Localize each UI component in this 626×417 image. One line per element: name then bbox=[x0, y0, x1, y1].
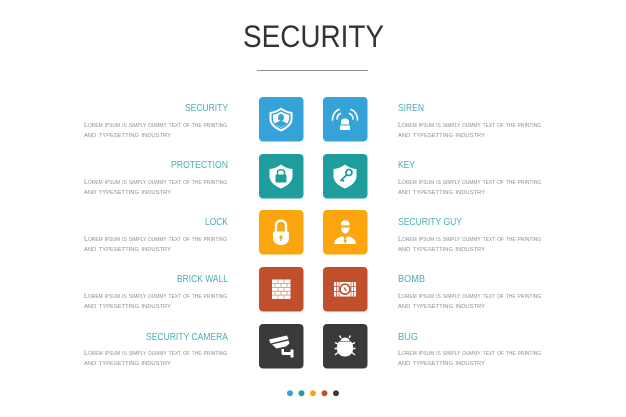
icon: protection shield with lock bbox=[259, 154, 304, 198]
pagination dots bbox=[287, 390, 339, 396]
panel: bug text: and typesetting industry bbox=[398, 358, 486, 367]
panel: siren text: SIREN bbox=[398, 102, 424, 114]
icon: bug bbox=[323, 324, 368, 368]
panel: security guy text: and typesetting industry bbox=[398, 244, 486, 253]
panel: security guy text: Lorem ipsum is simply dummy text of the printing bbox=[398, 234, 541, 243]
panel: brick wall text: BRICK WALL bbox=[177, 273, 228, 285]
panel: key text: Lorem ipsum is simply dummy text of the printing bbox=[398, 177, 541, 186]
panel: lock text bbox=[84, 216, 228, 253]
panel: brick wall text: Lorem ipsum is simply dummy text of the printing bbox=[84, 291, 227, 300]
icon: siren bbox=[323, 97, 368, 142]
panel: bomb text: BOMB bbox=[398, 273, 425, 285]
icon: padlock bbox=[259, 210, 304, 254]
panel: siren text: and typesetting industry bbox=[398, 130, 486, 139]
panel: key text bbox=[398, 159, 541, 196]
panel: protection text: Lorem ipsum is simply dummy text of the printing bbox=[84, 177, 227, 186]
panel: protection text bbox=[84, 159, 228, 196]
panel: brick wall text: and typesetting industry bbox=[84, 301, 172, 310]
panel: bug text: BUG bbox=[398, 331, 418, 343]
title: SECURITY bbox=[243, 18, 384, 54]
title underline bbox=[257, 70, 368, 71]
panel: siren text bbox=[398, 102, 541, 139]
panel: security text: and typesetting industry bbox=[84, 130, 172, 139]
icon: key shield bbox=[323, 154, 368, 198]
icon: brick wall bbox=[259, 267, 304, 312]
panel: protection text: PROTECTION bbox=[171, 159, 228, 171]
panel: bomb text: Lorem ipsum is simply dummy text of the printing bbox=[398, 291, 541, 300]
panel: security camera text: Lorem ipsum is simply dummy text of the printing bbox=[84, 348, 227, 357]
icon: bomb bbox=[323, 267, 368, 312]
icon: security guy bbox=[323, 210, 368, 254]
panel: security guy text bbox=[398, 216, 541, 253]
panel: security guy text: SECURITY GUY bbox=[398, 216, 462, 228]
panel: security camera text bbox=[84, 331, 228, 367]
panel: security camera text: SECURITY CAMERA bbox=[146, 331, 228, 343]
icon: security camera bbox=[259, 324, 304, 368]
panel: bug text: Lorem ipsum is simply dummy text of the printing bbox=[398, 348, 541, 357]
panel: bomb text bbox=[398, 273, 541, 310]
panel: security text: Lorem ipsum is simply dummy text of the printing bbox=[84, 120, 227, 129]
panel: bomb text: and typesetting industry bbox=[398, 301, 486, 310]
panel: bug text bbox=[398, 331, 541, 367]
panel: lock text: and typesetting industry bbox=[84, 244, 172, 253]
panel: lock text: LOCK bbox=[205, 216, 228, 228]
panel: security camera text: and typesetting industry bbox=[84, 358, 172, 367]
panel: security text: SECURITY bbox=[185, 102, 228, 114]
panel: siren text: Lorem ipsum is simply dummy text of the printing bbox=[398, 120, 541, 129]
panel: security text bbox=[84, 102, 228, 139]
panel: key text: KEY bbox=[398, 159, 415, 171]
panel: protection text: and typesetting industry bbox=[84, 187, 172, 196]
panel: brick wall text bbox=[84, 273, 228, 310]
panel: key text: and typesetting industry bbox=[398, 187, 486, 196]
panel: lock text: Lorem ipsum is simply dummy text of the printing bbox=[84, 234, 227, 243]
icon: security shield with person bbox=[259, 97, 304, 142]
